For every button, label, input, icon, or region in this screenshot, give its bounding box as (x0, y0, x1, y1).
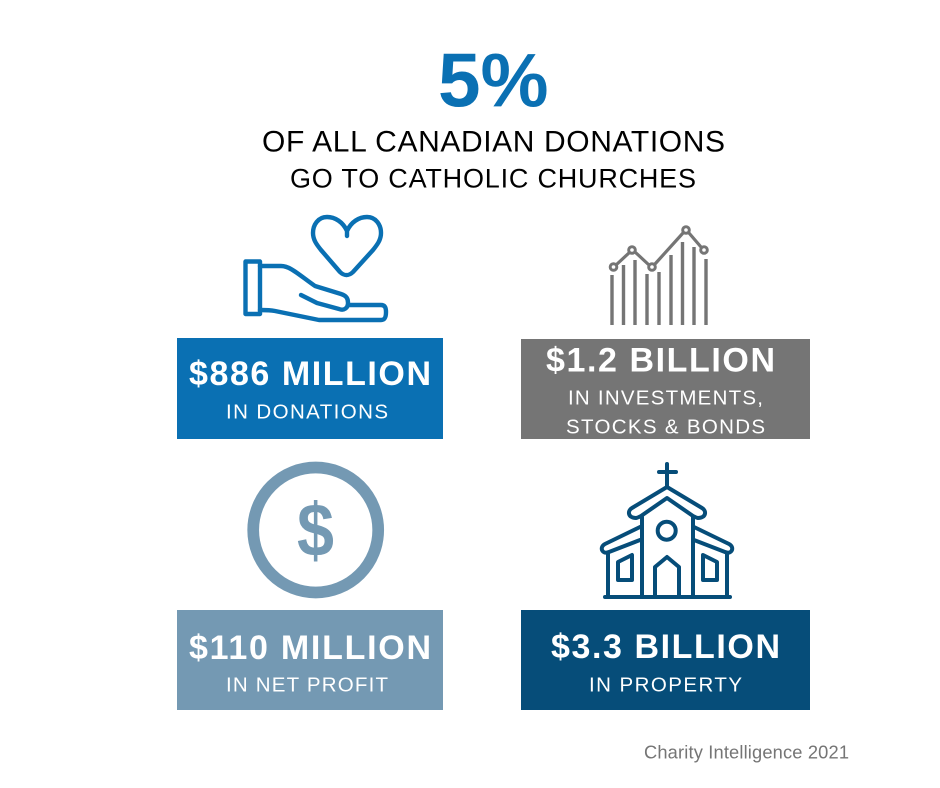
stat box: net profit (177, 610, 443, 710)
stat label: in investments: IN INVESTMENTS, (568, 386, 763, 410)
title block (262, 38, 725, 194)
stat value: $1.2 billion: $1.2 BILLION (546, 342, 775, 380)
panel: property (521, 464, 810, 710)
icon: dollar coin: $ (297, 488, 334, 572)
panel: donations (177, 217, 443, 439)
stat box: investments (521, 339, 810, 439)
stat box: donations (177, 338, 443, 439)
icon: church (602, 464, 732, 597)
stat value: $886 million: $886 MILLION (189, 355, 431, 393)
icon: hand holding heart (246, 217, 386, 320)
source credit: Charity Intelligence 2021 (644, 742, 849, 762)
stat label: stocks and bonds: STOCKS & BONDS (566, 416, 765, 438)
headline: 5%: 5% (438, 38, 549, 124)
stat box: property (521, 610, 810, 710)
panel: investments (521, 227, 810, 439)
panel: net profit (177, 468, 443, 710)
stat value: $3.3 billion: $3.3 BILLION (551, 628, 780, 666)
stat label: in net profit: IN NET PROFIT (226, 674, 388, 696)
stat label: in donations: IN DONATIONS (226, 400, 388, 424)
subtitle line 1: OF ALL CANADIAN DONATIONS (262, 126, 725, 158)
stat label: in property: IN PROPERTY (589, 674, 742, 696)
icon: line and bar chart (610, 227, 707, 325)
subtitle line 2: GO TO CATHOLIC CHURCHES (290, 164, 696, 194)
stat value: $110 million: $110 MILLION (189, 629, 431, 667)
icon: dollar coin (253, 468, 378, 592)
